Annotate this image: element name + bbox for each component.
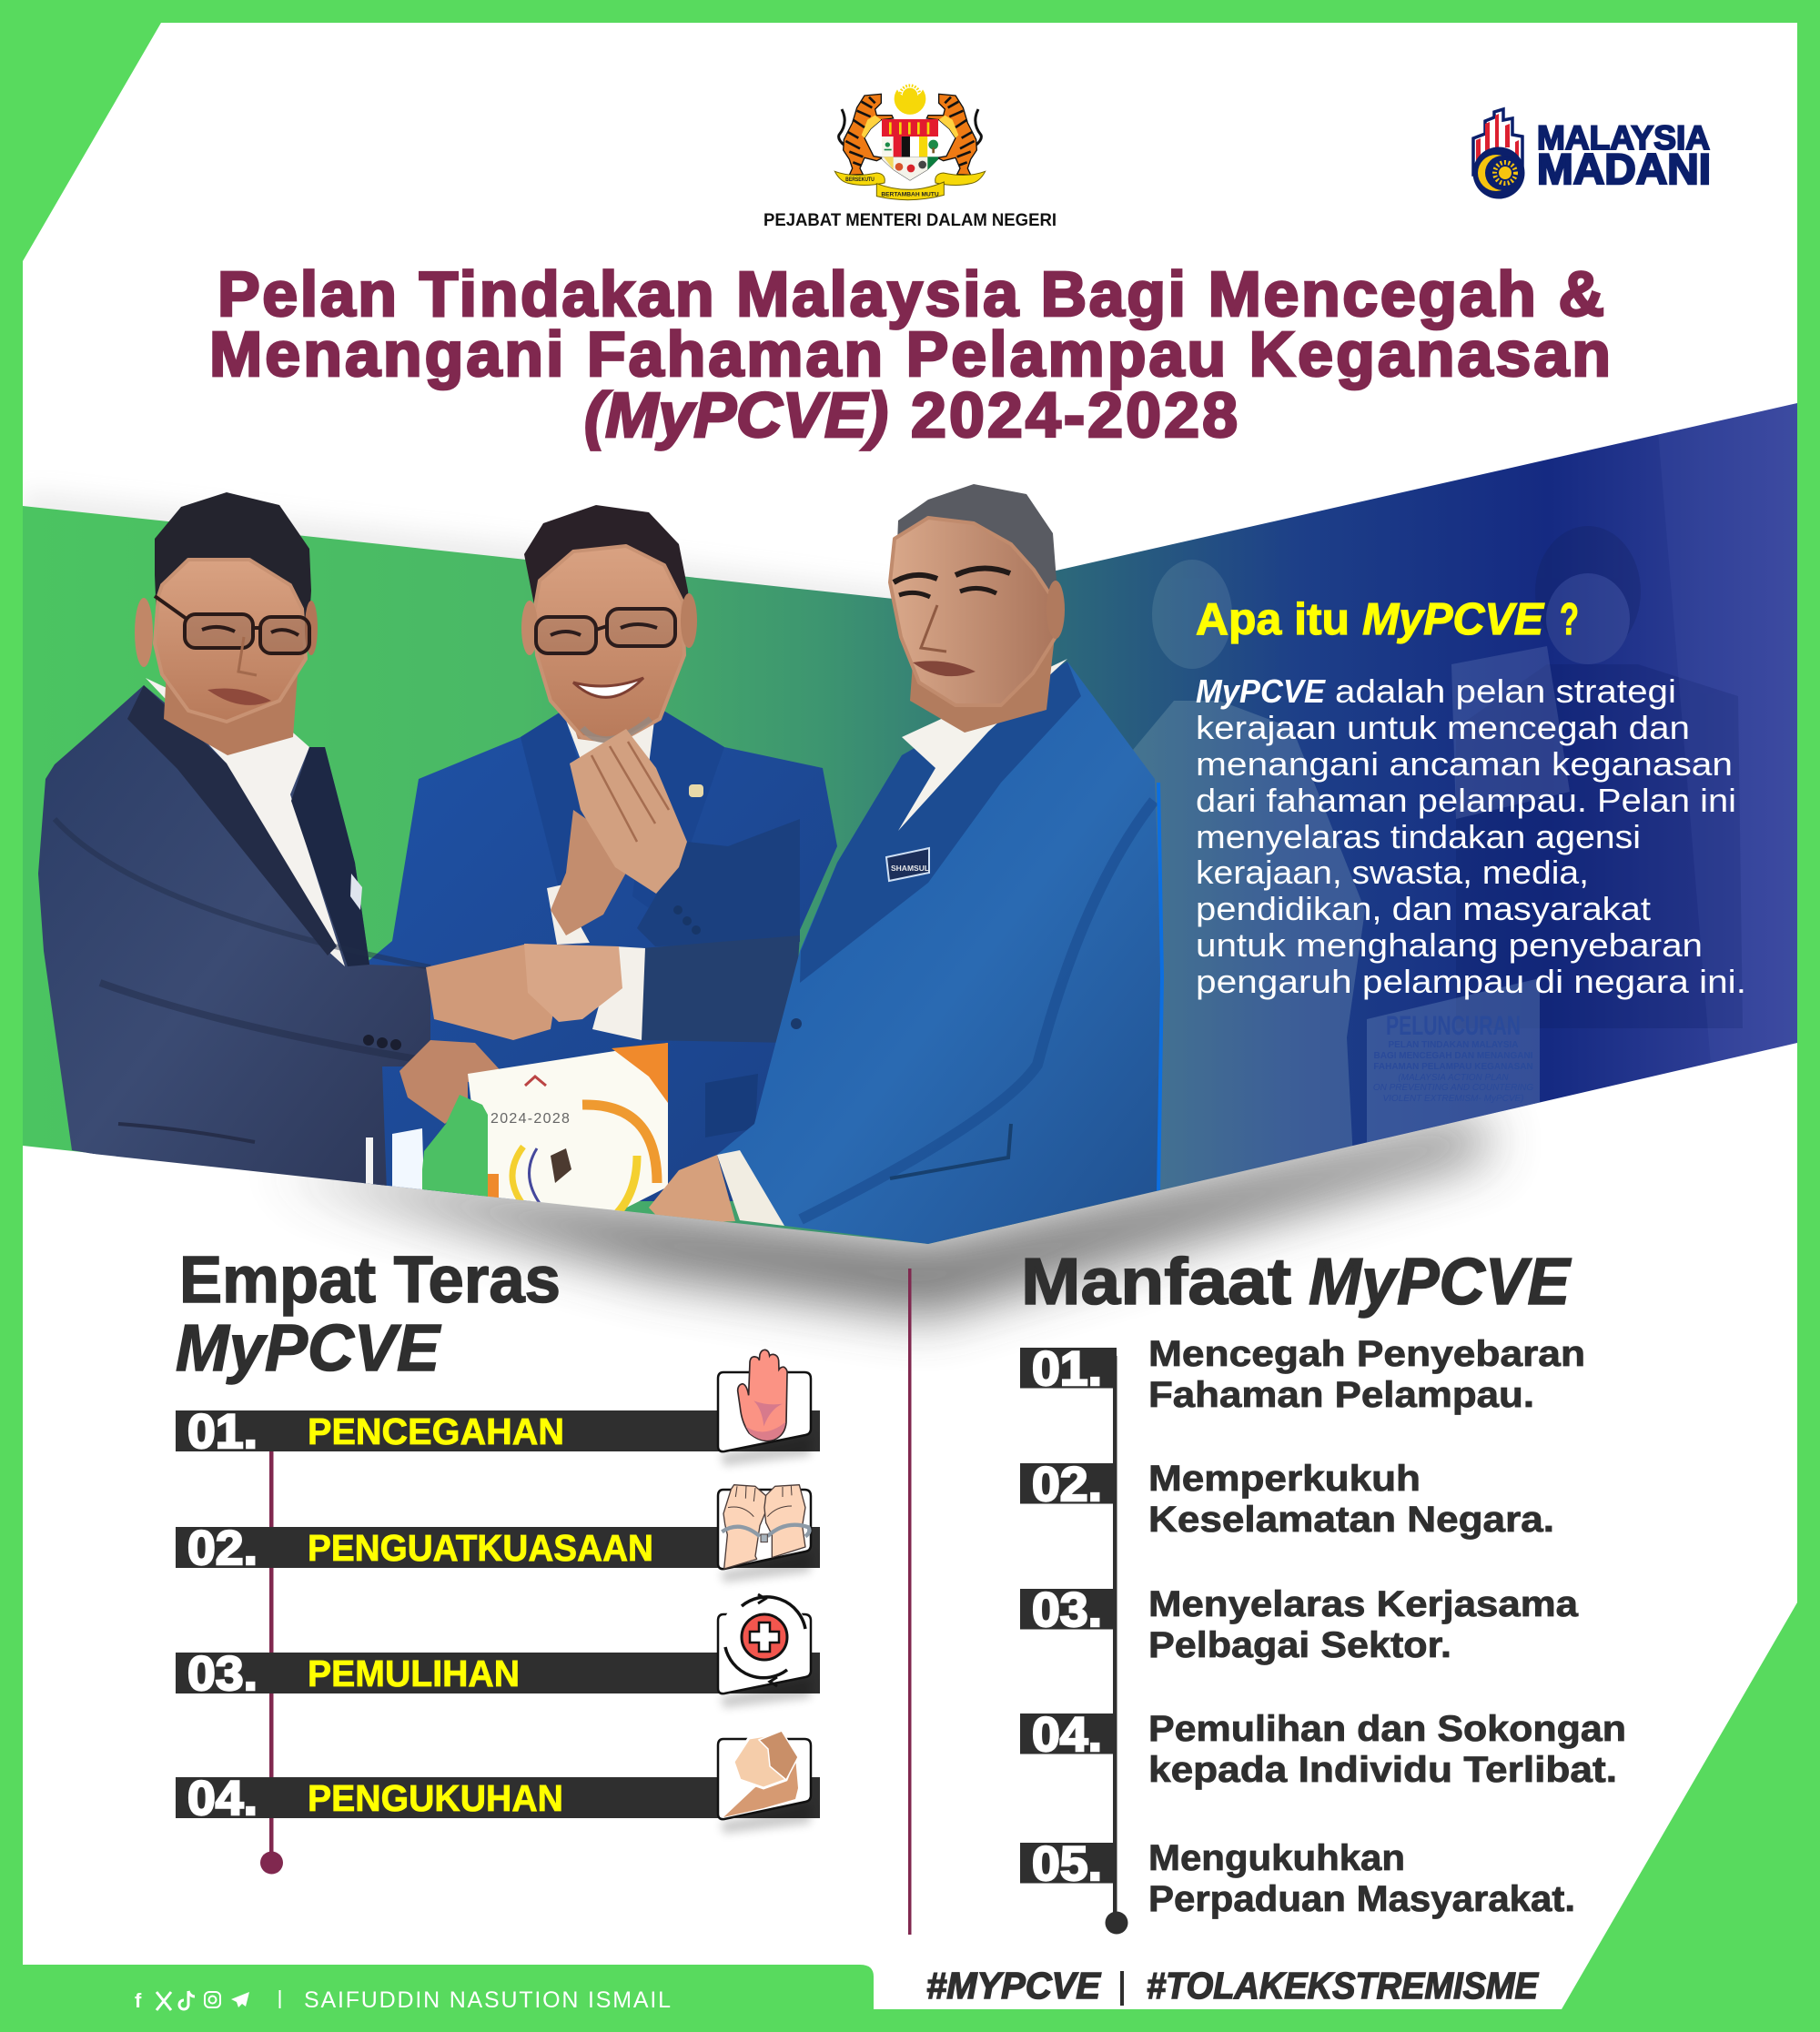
title (209, 258, 1611, 450)
open document booklet (468, 1043, 668, 1224)
panel heading: Apa itu (1196, 595, 1350, 644)
footer: social icons and name: SAIFUDDIN NASUTION ISMAIL (304, 1987, 671, 2013)
panel body text: dari fahaman pelampau. Pelan ini (1196, 782, 1736, 819)
panel heading: ? (1560, 595, 1579, 644)
benefit 03 (1020, 1583, 1579, 1665)
benefit 04: kepada Individu Terlibat. (1148, 1750, 1617, 1790)
heading: Manfaat MyPCVE (1021, 1246, 1572, 1319)
person: left man (38, 492, 559, 1201)
logo roundel (1472, 147, 1525, 198)
title: Pelan Tindakan Malaysia Bagi Mencegah & (217, 258, 1604, 329)
benefit 04: 04. (1032, 1708, 1102, 1762)
crest motto ribbon (834, 171, 986, 200)
panel body text: pendidikan, dan masyarakat (1196, 890, 1651, 927)
panel body text: pengaruh pelampau di negara ini. (1196, 963, 1746, 1000)
panel body text: kerajaan untuk mencegah dan (1196, 709, 1690, 746)
row 02: 02. (187, 1521, 258, 1575)
panel body text: adalah pelan strategi (1335, 672, 1676, 710)
crest crescent and star (895, 86, 925, 115)
panel body text: menangani ancaman keganasan (1196, 745, 1733, 783)
icon: clasped hands (718, 1731, 812, 1834)
row 03: PEMULIHAN (308, 1653, 520, 1694)
panel body text: kerajaan, swasta, media, (1196, 854, 1589, 891)
centre divider (908, 1269, 912, 1935)
title: (MyPCVE) (584, 379, 888, 450)
ministry caption: PEJABAT MENTERI DALAM NEGERI (763, 210, 1057, 230)
panel heading (1196, 595, 1579, 644)
background photo ghost: launch podium: (MALAYSIA ACTION PLAN (1398, 1073, 1509, 1083)
hashtags: #MYPCVE (926, 1965, 1102, 2007)
background ghost: lighter curtain (1656, 391, 1797, 1065)
benefit 01 (1020, 1334, 1585, 1415)
logo wordmark: MADANI (1537, 145, 1711, 193)
row 02: PENGUATKUASAAN (308, 1527, 653, 1569)
logo wordmark: MALAYSIA (1537, 119, 1710, 157)
person: middle man (364, 505, 837, 1201)
crest tiger: right (926, 94, 981, 175)
footer: social icons and name (135, 1987, 671, 2013)
timeline line (260, 1447, 283, 1875)
background photo ghost: launch podium (1367, 978, 1540, 1156)
row 01: PENCEGAHAN (308, 1410, 564, 1452)
background photo ghost: launch podium: FAHAMAN PELAMPAU KEGANASAN (1373, 1062, 1533, 1072)
crest: Jata Negara (834, 86, 986, 200)
panel: Manfaat MyPCVE (1020, 1246, 1626, 1935)
heading: Manfaat MyPCVE: MyPCVE (1309, 1246, 1572, 1319)
person: right man: SHAMSUL (891, 864, 929, 873)
panel body text: MyPCVE (1196, 672, 1326, 710)
open document booklet: 2024-2028 (490, 1111, 571, 1127)
benefit 03: 03. (1032, 1583, 1102, 1637)
heading: Empat Teras MyPCVE: MyPCVE (176, 1312, 441, 1385)
panel: Apa itu MyPCVE (1196, 595, 1746, 1000)
row 03: 03. (187, 1647, 258, 1701)
icon: cuffed fists (718, 1485, 812, 1582)
title: Menangani Fahaman Pelampau Keganasan (209, 318, 1611, 389)
benefits timeline (1105, 1356, 1128, 1935)
icon: stop hand (718, 1350, 812, 1466)
hashtags (926, 1965, 1540, 2007)
benefit 03: Pelbagai Sektor. (1148, 1625, 1451, 1665)
title: 2024-2028 (911, 379, 1238, 450)
row 01 (176, 1405, 820, 1459)
benefit 03: Menyelaras Kerjasama (1148, 1584, 1579, 1624)
benefit 05: Perpaduan Masyarakat. (1148, 1879, 1575, 1919)
benefit 05: Mengukuhkan (1148, 1838, 1405, 1878)
panel body text: menyelaras tindakan agensi (1196, 818, 1641, 855)
gradient photo band (23, 391, 1797, 1247)
crest: Jata Negara: BERTAMBAH MUTU (881, 191, 939, 197)
background photo ghost: launch podium: ON PREVENTING AND COUNTERING (1373, 1083, 1533, 1093)
background photo ghost: launch podium: PELAN TINDAKAN MALAYSIA (1389, 1040, 1518, 1050)
heading: Manfaat MyPCVE: Manfaat (1021, 1246, 1291, 1319)
social icons: f (135, 1989, 142, 2012)
benefit 02: Memperkukuh (1148, 1459, 1421, 1499)
person: right man (422, 484, 1162, 1244)
logo bars (1473, 109, 1522, 175)
benefit 01: 01. (1032, 1342, 1102, 1396)
benefit 02: Keselamatan Negara. (1148, 1500, 1554, 1540)
crest shield (882, 119, 938, 180)
row 04 (176, 1772, 820, 1825)
panel heading: MyPCVE (1362, 595, 1544, 644)
benefit 02: 02. (1032, 1458, 1102, 1511)
benefit 04 (1020, 1708, 1626, 1790)
hashtags: #TOLAKEKSTREMISME (1147, 1965, 1540, 2007)
background photo ghost: launch podium: PELUNCURAN (1386, 1011, 1521, 1041)
benefit 05: 05. (1032, 1837, 1102, 1891)
panel body text (1196, 672, 1746, 1000)
crest: Jata Negara: BERSEKUTU (845, 177, 875, 183)
background photo ghost: left guest (1130, 560, 1365, 1198)
logo wordmark (1537, 119, 1711, 193)
row 02 (176, 1521, 820, 1575)
row 04: 04. (187, 1772, 258, 1825)
panel body text: untuk menghalang penyebaran (1196, 926, 1703, 964)
panel: Empat Teras (176, 1244, 820, 1875)
social icons (135, 1989, 249, 2012)
photo: three men shaking hands (38, 484, 1162, 1244)
benefit 01: Mencegah Penyebaran (1148, 1334, 1585, 1374)
icon: recovery circle (718, 1593, 812, 1708)
row 04: PENGUKUHAN (308, 1777, 563, 1819)
background photo ghost: minister (1456, 526, 1743, 1028)
background photo ghost: launch podium: BAGI MENCEGAH DAN MENANGANI (1374, 1051, 1533, 1061)
heading: Empat Teras MyPCVE: Empat Teras (179, 1244, 561, 1317)
crest tiger: left (839, 94, 894, 175)
benefit 05 (1020, 1837, 1575, 1919)
background photo ghost: document held up (1451, 646, 1570, 819)
logo: Malaysia Madani (1472, 109, 1711, 198)
benefit 01: Fahaman Pelampau. (1148, 1375, 1534, 1415)
heading: Empat Teras MyPCVE (176, 1244, 561, 1385)
row 03 (176, 1647, 820, 1701)
background photo ghost: launch podium: VIOLENT EXTREMISM- MyPCVE) (1382, 1094, 1524, 1104)
benefit 04: Pemulihan dan Sokongan (1148, 1709, 1626, 1749)
band drop shadow (23, 491, 1492, 1315)
benefit 02 (1020, 1458, 1554, 1540)
row 01: 01. (187, 1405, 258, 1459)
